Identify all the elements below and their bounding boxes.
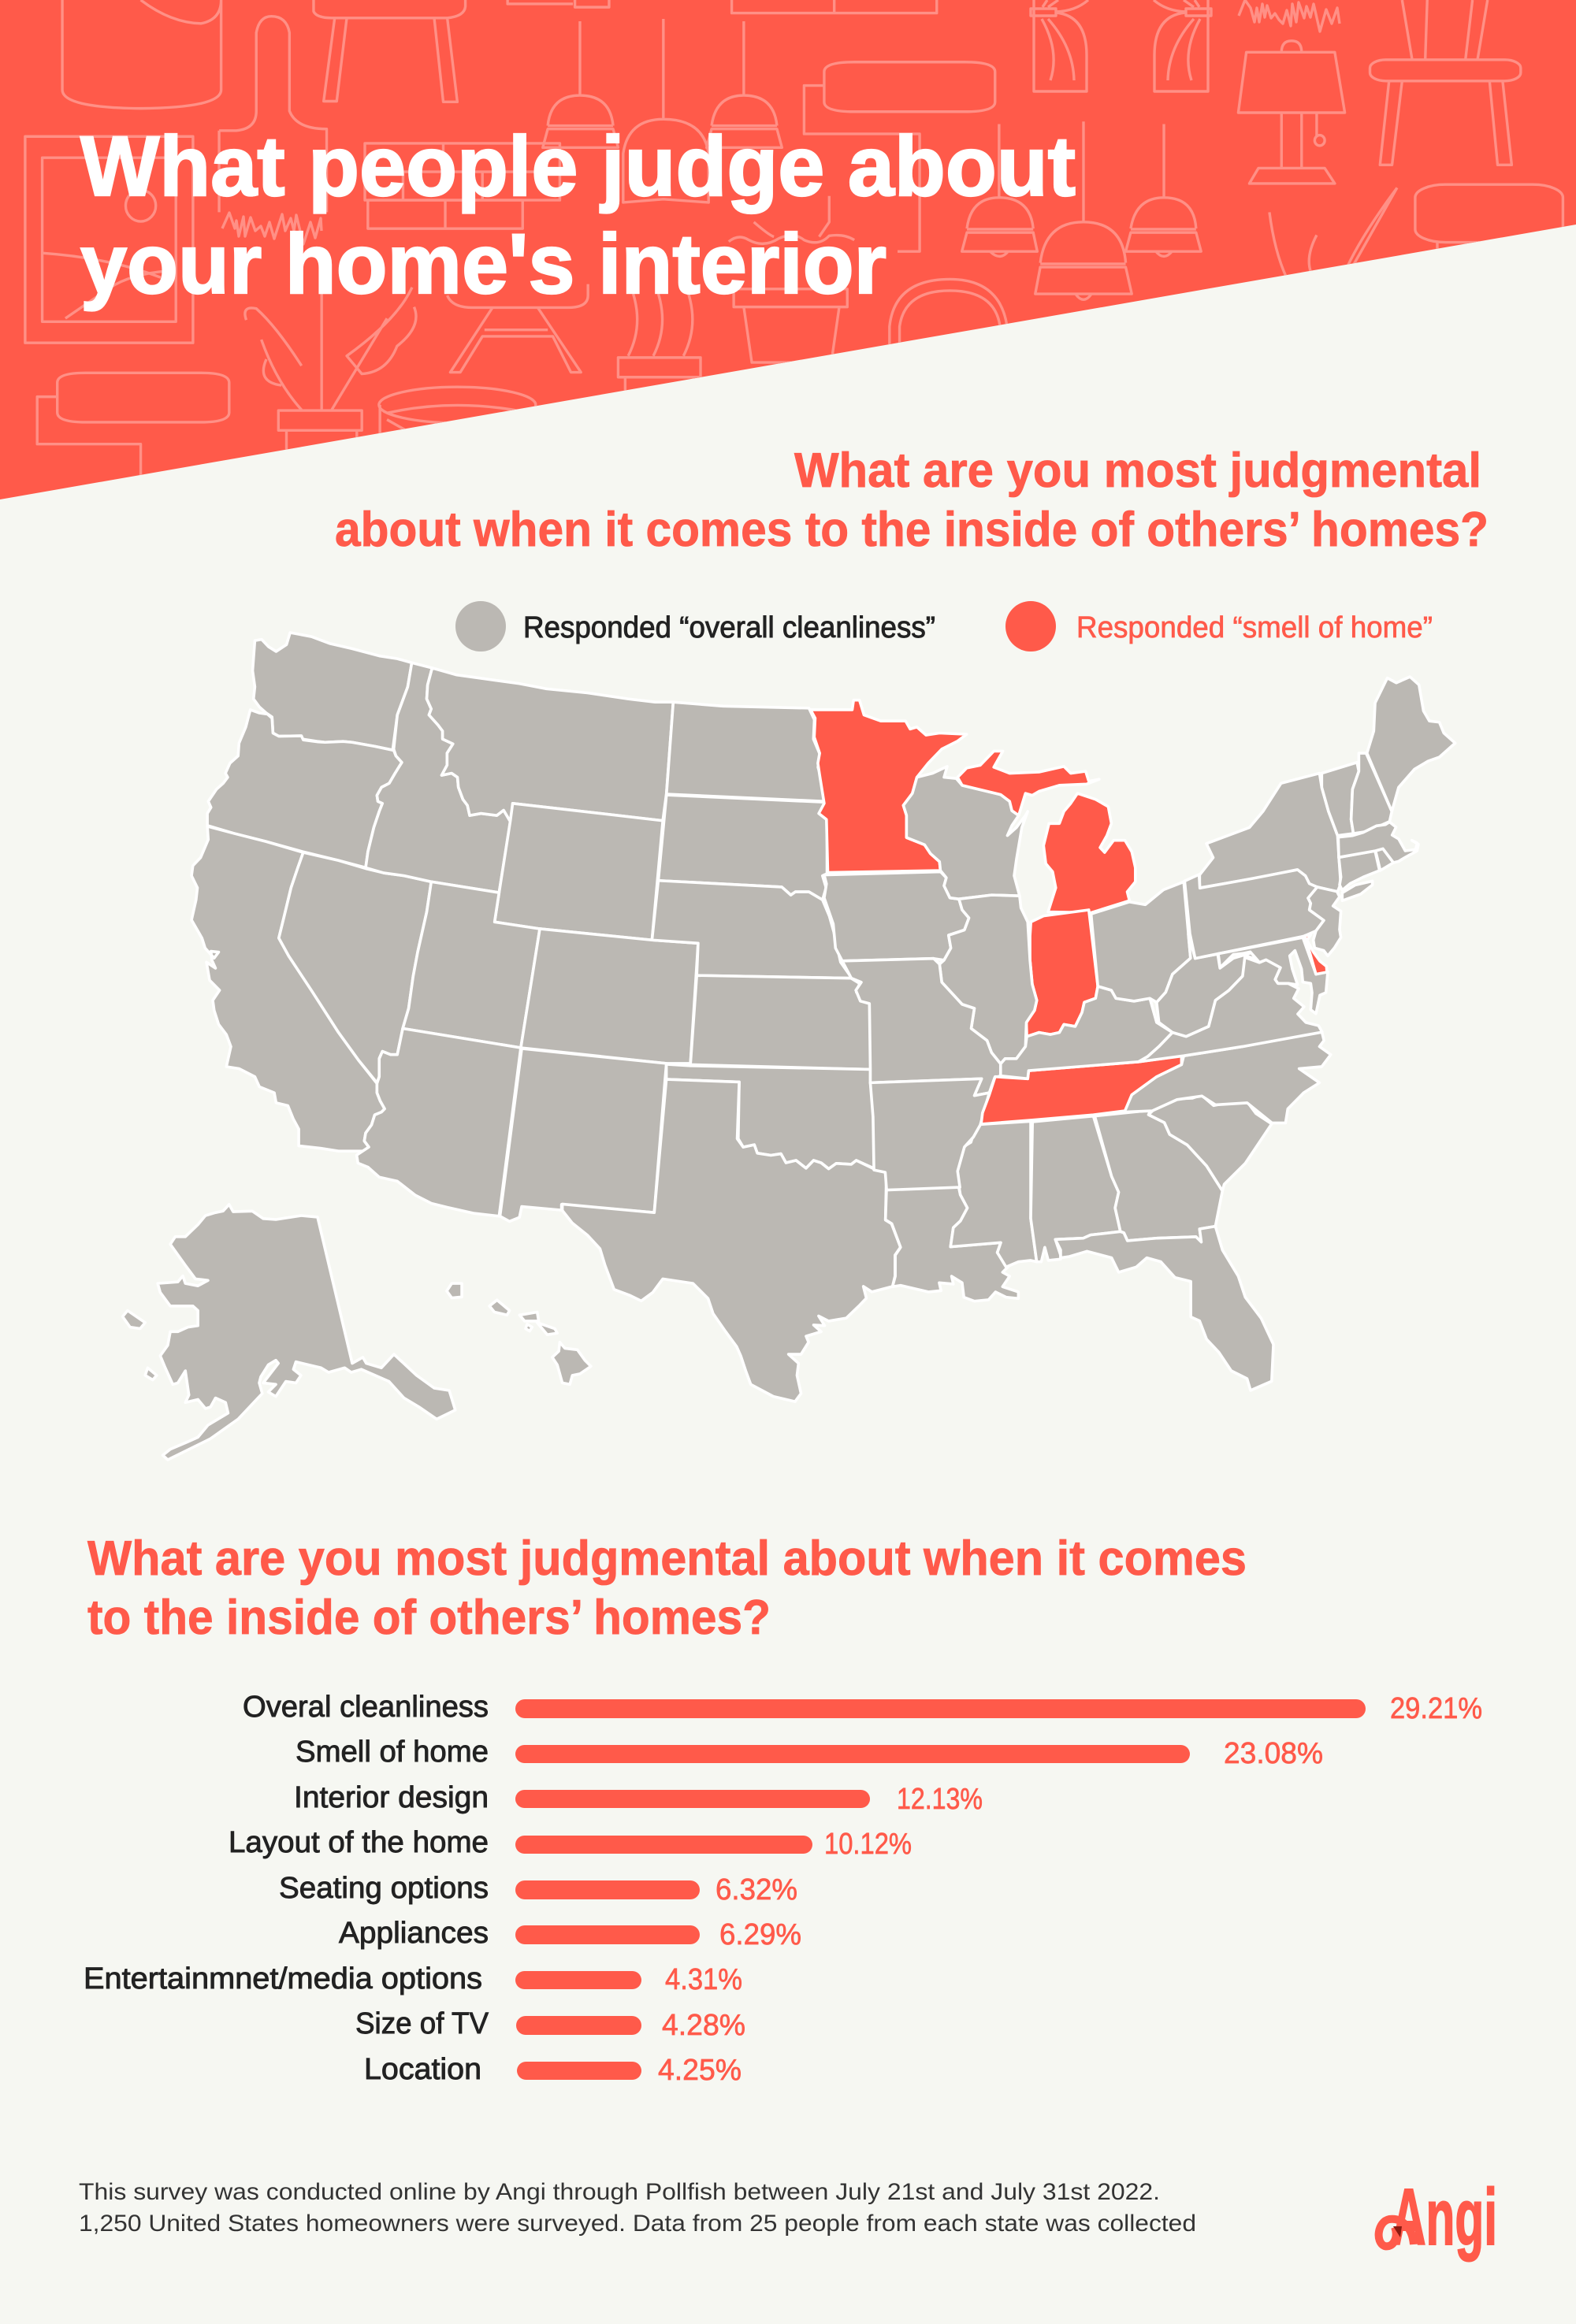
row: interior design: 12.13% <box>897 1783 983 1816</box>
heading: map question: What are you most judgmental <box>794 444 1481 498</box>
Indiana <box>1026 910 1098 1037</box>
row: entertainment/media options: Entertainmnet/media options <box>84 1962 482 1995</box>
heading: bar chart question <box>87 1531 1247 1645</box>
row: entertainment/media options: 4.31% <box>665 1963 742 1996</box>
row: entertainment/media options <box>84 1962 742 1996</box>
row: seating options: Seating options <box>279 1872 489 1905</box>
heading: map question <box>335 444 1489 557</box>
footnote: This survey was conducted online by Angi through Pollfish between July 21st and July 31st 2022. <box>79 2179 1160 2205</box>
Delaware <box>1305 935 1327 975</box>
row: interior design <box>294 1781 983 1816</box>
row: overal cleanliness <box>243 1691 1482 1725</box>
bar chart <box>84 1691 1482 2087</box>
row: location: 4.25% <box>658 2054 742 2087</box>
Minnesota <box>811 700 967 873</box>
row: location: Location <box>364 2053 481 2086</box>
logo: Angi <box>1379 2174 1497 2262</box>
header banner <box>0 0 1576 499</box>
Hawaii <box>447 1283 591 1384</box>
heading: map question: about when it comes to the inside of others’ homes? <box>335 503 1489 557</box>
footnote <box>79 2179 1196 2237</box>
row: size of tv <box>355 2007 745 2042</box>
row: appliances <box>339 1917 801 1951</box>
Tennessee <box>981 1056 1181 1124</box>
row: location <box>364 2053 742 2087</box>
title: your home's interior <box>80 216 886 311</box>
map: US states by top answer <box>123 633 1455 1460</box>
legend <box>455 601 1433 652</box>
heading: bar chart question: to the inside of others’ homes? <box>87 1591 771 1645</box>
row: overal cleanliness: Overal cleanliness <box>243 1691 489 1724</box>
row: layout of the home: 10.12% <box>824 1828 912 1861</box>
title <box>80 118 1076 311</box>
row: layout of the home: Layout of the home <box>229 1826 489 1859</box>
row: size of tv: 4.28% <box>662 2009 745 2042</box>
row: appliances: Appliances <box>339 1917 489 1950</box>
row: overal cleanliness: 29.21% <box>1390 1692 1482 1725</box>
title: What people judge about <box>80 118 1076 213</box>
footnote: 1,250 United States homeowners were surveyed. Data from 25 people from each state was collected <box>79 2211 1196 2237</box>
legend: Responded “smell of home” <box>1076 611 1433 644</box>
row: smell of home: Smell of home <box>296 1736 489 1769</box>
row: smell of home: 23.08% <box>1224 1737 1323 1770</box>
row: interior design: Interior design <box>294 1781 489 1814</box>
logo: Angi: Angi <box>1392 2174 1497 2262</box>
heading: bar chart question: What are you most judgmental about when it comes <box>87 1531 1247 1586</box>
furniture line pattern <box>25 0 1563 477</box>
row: seating options <box>279 1872 797 1906</box>
row: smell of home <box>296 1736 1323 1770</box>
row: appliances: 6.29% <box>719 1918 801 1951</box>
legend: Responded “overall cleanliness” <box>523 611 935 644</box>
Alaska <box>158 1205 455 1460</box>
Michigan <box>957 751 1136 913</box>
row: layout of the home <box>229 1826 912 1861</box>
row: seating options: 6.32% <box>716 1873 797 1906</box>
row: size of tv: Size of TV <box>355 2007 489 2040</box>
